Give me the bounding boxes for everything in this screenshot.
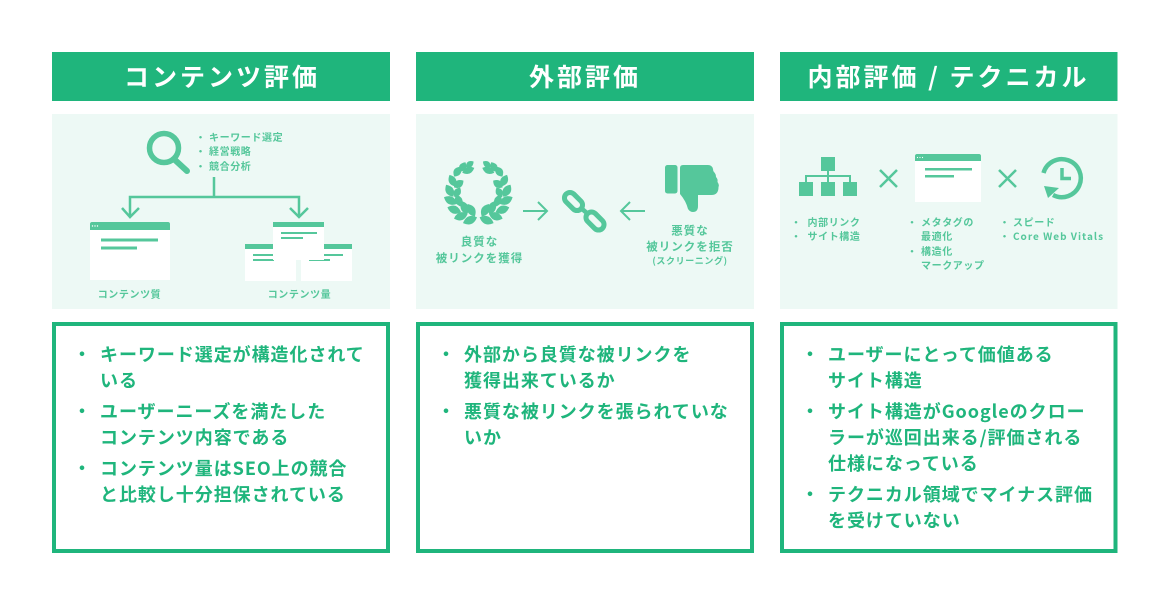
list: speed: Core Web Vitals: [1013, 228, 1104, 243]
keyword list: ・: [196, 143, 206, 158]
list: metadata: メタタグの: [921, 214, 974, 229]
text box: backlink checks: ・: [437, 341, 456, 367]
label: content quality: コンテンツ質: [98, 286, 161, 301]
windows: content quantity: [245, 222, 352, 281]
list: metadata: [907, 214, 985, 272]
heading: 外部評価: 外部評価: [529, 58, 641, 94]
heading: コンテンツ評価: コンテンツ評価: [124, 58, 320, 94]
keyword list: 経営戦略: [209, 143, 251, 158]
text box: content checks: いる: [100, 367, 138, 393]
text box: technical checks: 仕様になっている: [828, 450, 979, 476]
list: speed: [1000, 214, 1104, 243]
text box: backlink checks: 獲得出来ているか: [464, 367, 616, 393]
text box: technical checks: サイト構造がGoogleのクロー: [828, 398, 1086, 424]
heading: コンテンツ評価: [52, 52, 390, 101]
label: good backlinks: 良質な: [461, 234, 498, 250]
label: reject bad backlinks: 被リンクを拒否: [646, 238, 734, 254]
panel: technical diagram: [780, 114, 1118, 309]
text box: technical checks: ・: [801, 341, 820, 367]
label: reject bad backlinks: 悪質な: [671, 222, 709, 238]
text box: content checks: ・: [73, 455, 92, 481]
arrow: right: [523, 202, 547, 220]
text box: content checks: コンテンツ内容である: [100, 424, 289, 450]
label: reject bad backlinks: (スクリーニング): [652, 254, 728, 267]
text box: content checks: [54, 324, 388, 551]
text box: content checks: キーワード選定が構造化されて: [100, 341, 365, 367]
symbol: times: [880, 170, 897, 187]
window: content quality: [90, 222, 170, 280]
list: metadata: マークアップ: [921, 257, 985, 272]
icon: thumbs down: [665, 165, 719, 212]
list: internal links: ・: [791, 214, 802, 229]
heading: 内部評価 / テクニカル: [780, 52, 1118, 101]
list: metadata: 構造化: [921, 243, 953, 258]
list: internal links: 内部リンク: [808, 214, 860, 229]
heading: 外部評価: [416, 52, 754, 101]
label: good backlinks: [436, 234, 523, 266]
label: content quantity: コンテンツ量: [268, 286, 331, 301]
text box: backlink checks: ・: [437, 398, 456, 424]
keyword list: 競合分析: [209, 158, 251, 173]
panel: content diagram: [52, 114, 390, 309]
arrow: left: [621, 202, 645, 220]
column: 外部評価: [416, 52, 754, 551]
text box: content checks: ・: [73, 341, 92, 367]
keyword list: [196, 129, 283, 173]
text box: technical checks: ユーザーにとって価値ある: [828, 341, 1054, 367]
text box: content checks: と比較し十分担保されている: [100, 481, 346, 507]
symbol: times: [999, 170, 1016, 187]
keyword list: キーワード選定: [209, 129, 283, 144]
icon: magnifier: [150, 134, 187, 171]
list: metadata: ・: [907, 243, 918, 258]
label: good backlinks: 被リンクを獲得: [436, 250, 523, 266]
list: speed: ・: [1000, 228, 1010, 243]
text box: backlink checks: いか: [464, 424, 502, 450]
list: metadata: 最適化: [921, 228, 953, 243]
text box: backlink checks: [418, 324, 752, 551]
text box: technical checks: ・: [801, 398, 820, 424]
icon: site structure: [799, 157, 857, 196]
column: 内部評価 / テクニカル: [780, 52, 1118, 551]
list: speed: スピード: [1013, 214, 1055, 229]
text box: technical checks: サイト構造: [828, 367, 923, 393]
list: speed: ・: [1000, 214, 1010, 229]
text box: technical checks: テクニカル領域でマイナス評価: [828, 481, 1093, 507]
text box: content checks: コンテンツ量はSEO上の競合: [100, 455, 347, 481]
label: reject bad backlinks: [646, 222, 734, 267]
text box: content checks: ユーザーニーズを満たした: [100, 398, 326, 424]
icon: clock history: [1044, 159, 1081, 198]
text box: content checks: ・: [73, 398, 92, 424]
column: コンテンツ評価: [52, 52, 390, 551]
window: page: [915, 154, 981, 202]
text box: backlink checks: 悪質な被リンクを張られていな: [464, 398, 729, 424]
list: internal links: サイト構造: [808, 228, 860, 243]
text box: technical checks: を受けていない: [828, 507, 961, 533]
panel: backlink diagram: [416, 114, 754, 309]
text box: backlink checks: 外部から良質な被リンクを: [464, 341, 691, 367]
list: metadata: ・: [907, 214, 918, 229]
text box: technical checks: ・: [801, 481, 820, 507]
keyword list: ・: [196, 129, 206, 144]
text box: technical checks: ラーが巡回出来る/評価される: [828, 424, 1082, 450]
heading: 内部評価 / テクニカル: 内部評価 / テクニカル: [807, 58, 1090, 94]
keyword list: ・: [196, 158, 206, 173]
icon: laurel wreath: [442, 159, 514, 227]
icon: chain link: [562, 190, 606, 232]
arrows: branching tree: [122, 177, 308, 217]
list: internal links: ・: [791, 228, 802, 243]
text box: technical checks: [782, 324, 1116, 551]
list: internal links: [791, 214, 860, 243]
